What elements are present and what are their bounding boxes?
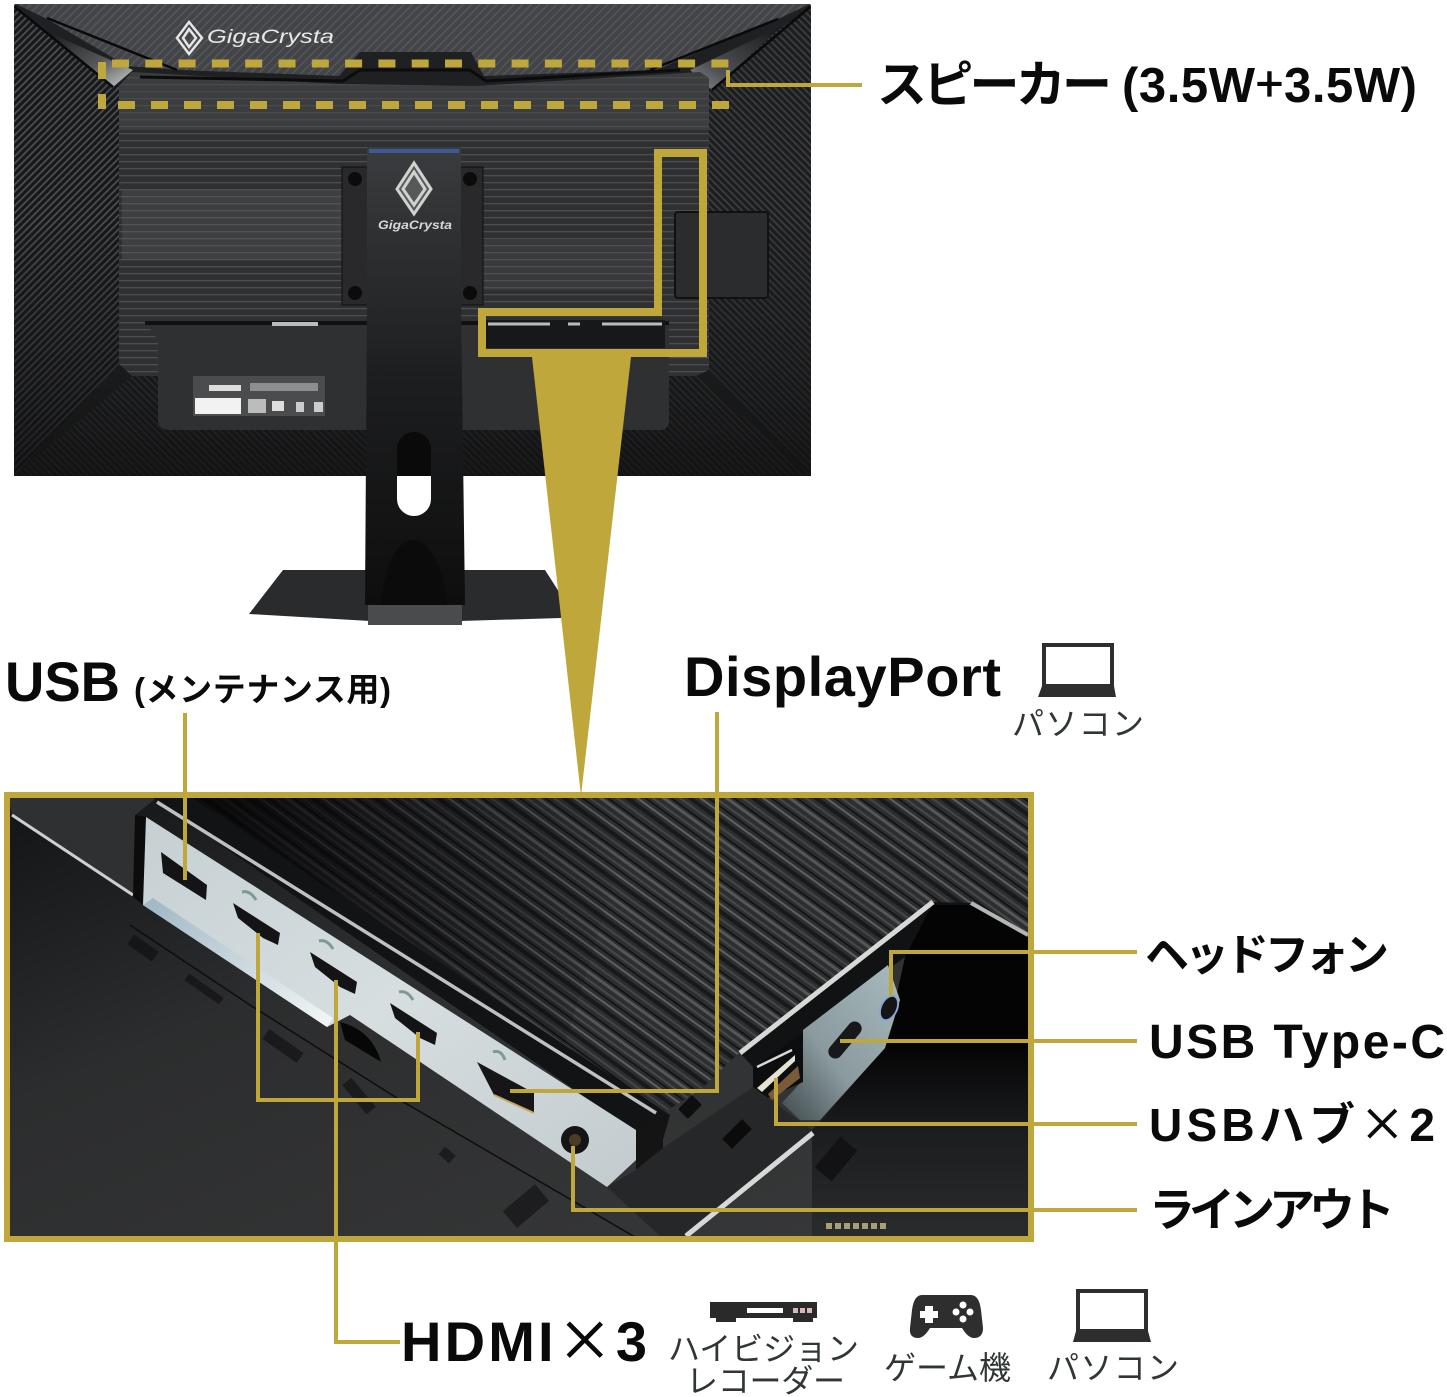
gamepad icon [910,1295,983,1338]
right silver edge [740,902,933,1053]
top chevron band [16,4,810,76]
photo background [8,796,1030,1238]
speaker connector line [728,70,862,85]
border shading [14,230,811,476]
DisplayPort leader line [510,712,717,1091]
plate lower highlight [484,240,654,290]
port strip highlights [488,322,662,326]
headphone label: ヘッドフォン [1145,931,1389,980]
HDMI port 2 [310,941,357,994]
speaker label: スピーカー [877,57,1112,113]
game console caption: ゲーム機 [884,1350,1011,1386]
HDMI main leader line [336,980,400,1342]
audio jack inner [569,1134,581,1146]
USB hub port tongue [757,1055,795,1092]
black gap [340,1022,381,1062]
HDMI port 1 [233,892,280,945]
port area highlight box [482,153,703,353]
PC caption: パソコン [1012,706,1144,742]
PC caption 2: パソコン [1047,1350,1179,1386]
recorder caption [668,1331,859,1397]
cable hole [397,432,431,476]
left wedge black edge [15,7,177,87]
lock slot [722,1119,752,1149]
rear plate [119,72,709,376]
monitor rear view [14,4,811,625]
USB maintenance label: (メンテナンス用) [134,671,391,708]
DisplayPort label: DisplayPort [684,645,1001,708]
stand blue top line [369,149,459,153]
side block [675,212,768,298]
left silver line [12,815,133,895]
USB hub lower port [768,1066,800,1100]
dark fade over stripes [170,796,640,1060]
recorder icon [710,1302,817,1322]
middle dark floor [607,1087,812,1236]
USB maintenance leader line [183,713,187,880]
bottom border stripes [14,376,811,476]
rating label [193,376,325,416]
plate end [636,1113,663,1170]
speaker label [877,46,1417,117]
plate highlight band [122,190,362,260]
laptop icon: HDMI [1073,1291,1151,1342]
right corner wedge [690,26,782,90]
lower silver edge [686,1133,813,1236]
stand base [249,570,561,621]
box top highlight [272,322,318,326]
USB hub port rim [757,1050,792,1067]
USB maintenance label [5,650,391,713]
dark band under right edge [740,902,971,1067]
close-up frame [7,795,1031,1239]
right wedge black edge [650,7,810,90]
USB hub leader line [776,1078,1137,1124]
black port post [133,815,146,905]
USB hub label: USBハブ×2 [1149,1089,1435,1155]
stand column [365,147,465,605]
USB-C port [825,1019,865,1061]
ports strip [485,320,665,348]
speaker highlight dashes [102,62,733,109]
stand foot [368,605,462,625]
plate top tone [119,72,709,130]
left corner wedge [43,30,133,87]
right border stripes [709,8,811,476]
black line below plate [130,925,640,1240]
plate flange [143,898,333,1027]
stand arch [381,540,447,605]
VESA mount [342,167,483,305]
lower right markings [826,1223,886,1229]
USB Type-C leader line [840,1039,1137,1043]
headphone jack [876,993,902,1023]
top logo diamond [177,22,202,54]
stand logo diamond [397,163,431,214]
USB maintenance port [161,852,207,900]
plate top black seam [140,70,680,81]
speaker label: (3.5W+3.5W) [1122,46,1417,117]
silver port plate [143,817,636,1187]
top logo text: GigaCrysta [207,27,334,48]
HDMI port 3 [390,992,437,1045]
line-out leader line [573,1146,1137,1210]
monitor body [14,4,811,476]
audio jack [561,1126,589,1154]
line-out label: ラインアウト [1149,1184,1395,1236]
HDMI bracket line [258,933,418,1100]
right top edge [971,903,1028,935]
small rear icon [678,1095,702,1119]
dark shadow along plate [150,796,670,1150]
cable hole white part [397,476,431,516]
recorder caption: ハイビジョン [668,1331,859,1367]
black block [885,905,1030,1048]
HDMI label: HDMI×3 [401,1297,647,1378]
USB hub ports [753,1032,803,1098]
embossed mark lower right [815,1137,857,1181]
top left wedge [8,796,159,895]
right silver plate [782,965,900,1120]
USB maintenance label: USB [5,650,120,713]
DisplayPort port [477,1051,534,1113]
striped rear surface [170,796,1030,1115]
box top edge [145,321,669,325]
stand logo text: GigaCrysta [378,218,452,232]
right dark panel [812,1048,1030,1236]
embossed marks [127,934,549,1228]
left border stripes [14,8,119,476]
laptop icon: DisplayPort [1038,645,1116,697]
zoom pointer triangle [532,357,631,796]
headphone leader line [891,952,1137,996]
silver edge on plate [157,802,656,1113]
port close-up photo [8,796,1030,1240]
USB Type-C label: USB Type-C [1149,1016,1445,1069]
lower rear box [145,322,669,430]
